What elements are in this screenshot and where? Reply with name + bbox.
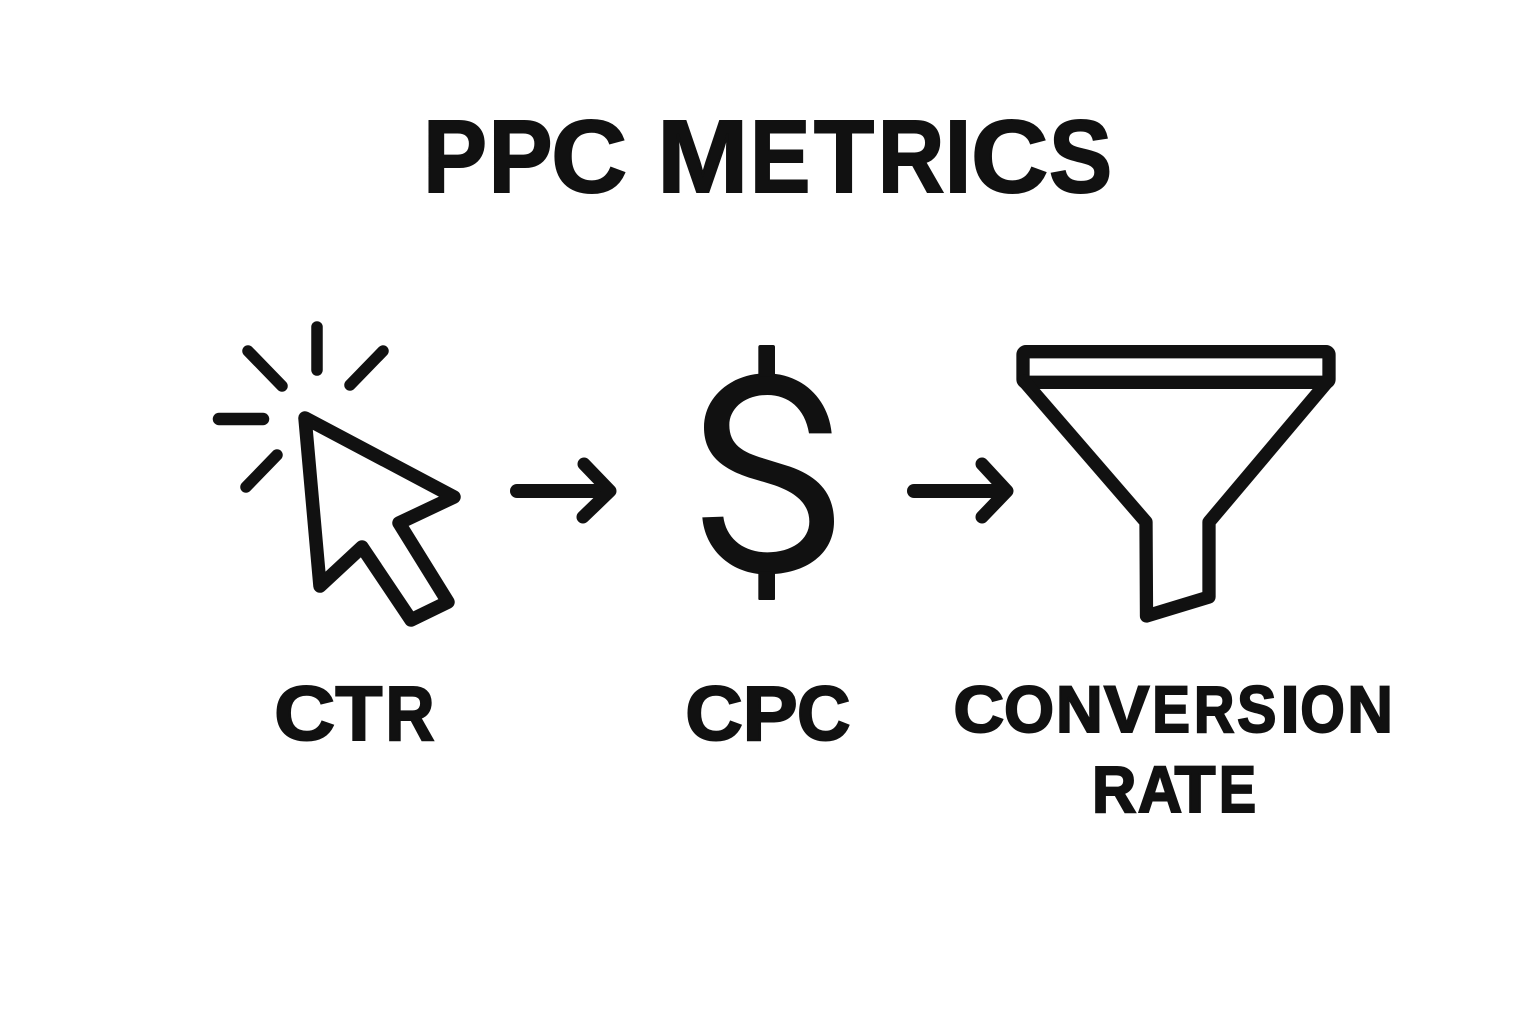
label: conversion rate: E (1152, 673, 1190, 746)
label: conversion rate: I (1280, 673, 1300, 746)
label: conversion rate: V (1104, 673, 1150, 746)
label: conversion rate: R (1194, 673, 1234, 746)
title: T (814, 99, 874, 214)
label: conversion rate: N (1347, 673, 1393, 746)
title: R (878, 99, 944, 214)
icon: dollar sign (702, 345, 834, 600)
label: CPC: P (742, 671, 798, 757)
icon: cursor click (219, 327, 454, 620)
label: CPC: C (797, 671, 850, 757)
title: I (944, 99, 972, 214)
label: CPC: C (685, 671, 743, 757)
label: conversion rate: C (954, 673, 1004, 746)
title: P (488, 99, 552, 214)
label: conversion rate: R (1092, 753, 1136, 826)
label: CTR: R (386, 671, 434, 757)
label: conversion rate: E (1219, 753, 1256, 826)
label: conversion rate: O (1004, 673, 1054, 746)
title: C (971, 99, 1048, 214)
label: conversion rate: T (1175, 753, 1215, 826)
label: conversion rate: N (1056, 673, 1103, 746)
title: C (551, 99, 627, 214)
cursor arrow (305, 418, 454, 620)
icon: funnel (1023, 352, 1329, 616)
label: conversion rate: A (1138, 753, 1182, 826)
arrow: CPC to funnel (914, 464, 1007, 517)
title: S (1049, 99, 1112, 214)
title: E (750, 99, 810, 214)
arrow: CTR to CPC (517, 464, 610, 517)
label: conversion rate: O (1300, 673, 1345, 746)
click rays (219, 327, 383, 487)
label: CTR: T (335, 671, 382, 757)
label: conversion rate: S (1237, 673, 1276, 746)
label: conversion rate (954, 673, 1393, 826)
title: P (423, 99, 487, 214)
title: M (657, 99, 748, 214)
label: CTR: C (274, 671, 335, 757)
